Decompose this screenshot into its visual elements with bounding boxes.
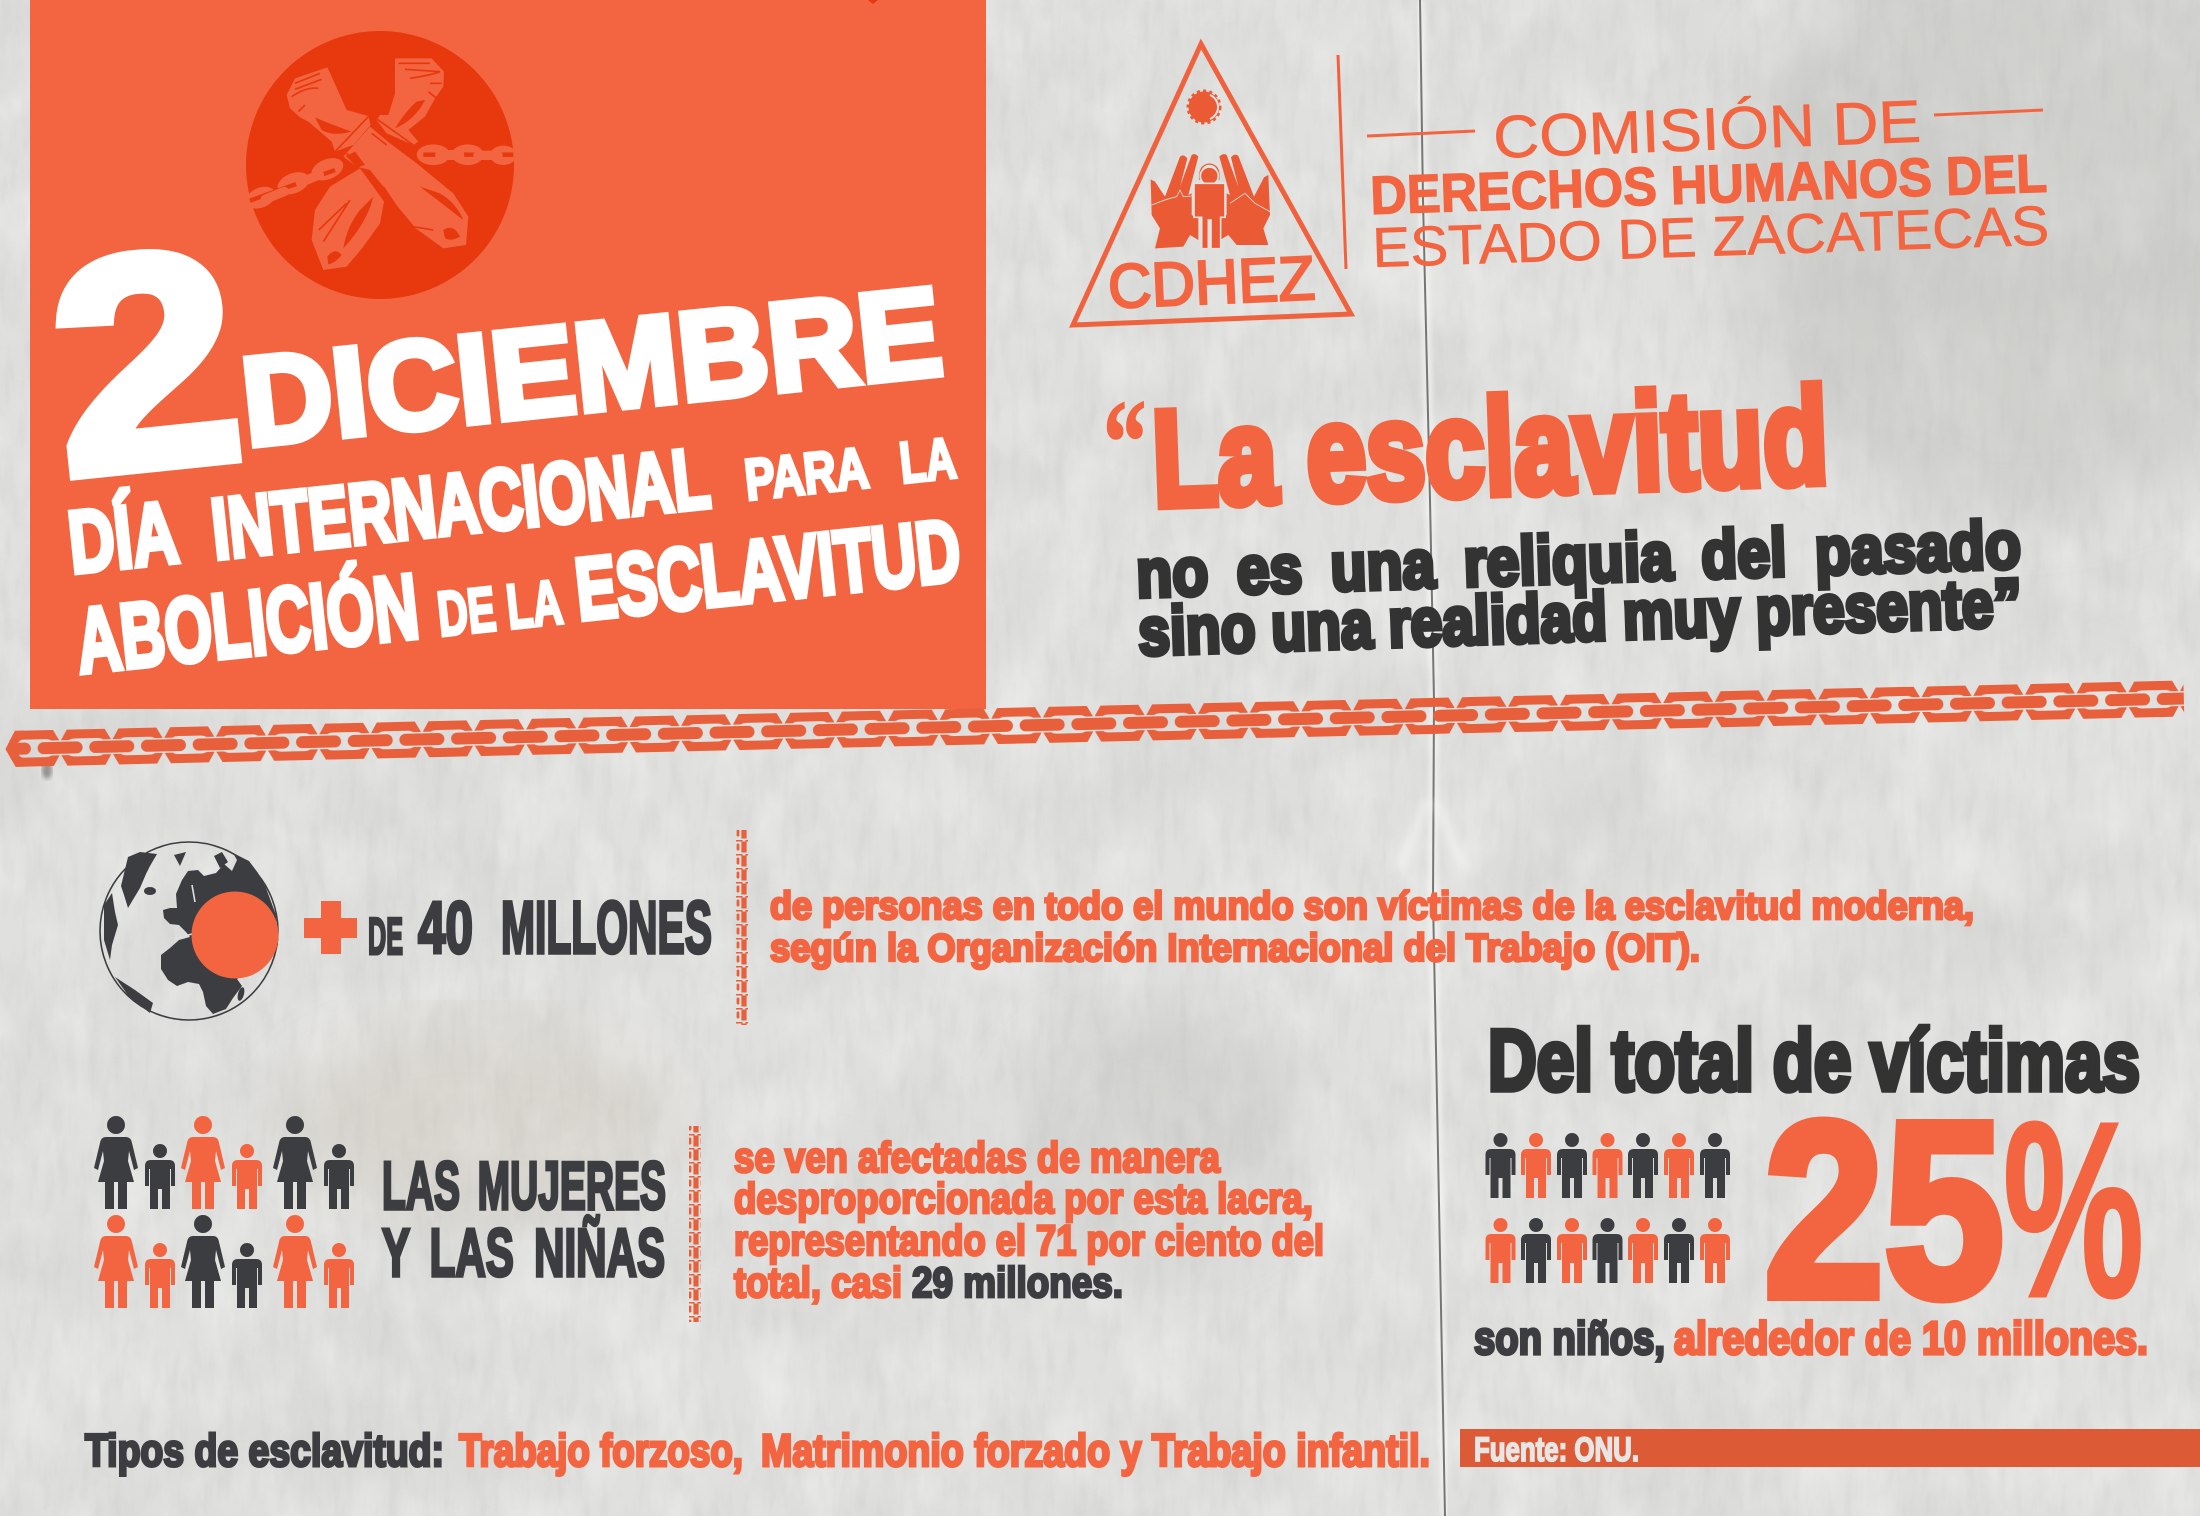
stat: more than 40 million: DE [368,908,403,966]
source bar [1460,1429,2200,1469]
day title: INTERNACIONAL [207,430,714,578]
text: children total: son niños, [1474,1312,1665,1364]
heading: institution name [1367,88,2050,279]
quote: sino una realidad muy presente” [1137,565,2023,670]
divider: logo rule [1338,55,1346,269]
quote: La esclavitud [1150,359,1831,535]
stat: 25 percent: 25 [1764,1070,2004,1349]
icon: vertical chain 2 [689,1126,701,1322]
heading: women and girls [382,1148,666,1291]
stat: more than 40 million: MILLONES [501,886,712,969]
text: types of slavery: Trabajo forzoso, [459,1425,743,1476]
pictogram: children [1486,1133,1730,1283]
heading: women and girls: Y LAS NIÑAS [382,1215,665,1291]
stat: more than 40 million [368,886,712,969]
heading: institution name: COMISIÓN DE [1492,88,1922,171]
stat: more than 40 million: 40 [418,888,473,969]
day title [64,425,965,693]
text: types of slavery: Tipos de esclavitud: [85,1425,444,1476]
day title: DÍA [64,482,182,592]
source bar: Fuente: ONU. [1474,1431,1639,1469]
icon: globe [100,842,278,1020]
mark: top edge fleck [868,0,878,4]
text: children total [1474,1312,2148,1364]
text: types of slavery: Matrimonio forzado y Trabajo infantil. [761,1425,1430,1476]
icon: plus sign [304,901,357,954]
text: women and girls description: se ven afectadas de manera [734,1134,1221,1182]
text: women and girls description: total, casi [734,1259,902,1307]
highlight: orange disc [192,892,278,978]
day title: ABOLICIÓN [71,555,423,693]
text: women and girls description [734,1134,1324,1307]
pictogram: women and girls [94,1116,354,1308]
logo acronym: CDHEZ [1107,244,1316,322]
icon: vertical chain 1 [736,830,748,1025]
icon: sun and moon [1188,92,1220,122]
month heading: DICIEMBRE [235,260,948,473]
date number: 2 [36,184,256,541]
heading: institution name: ESTADO DE ZACATECAS [1371,194,2050,279]
quote: “ [1101,375,1150,509]
quote [1101,359,2023,670]
text: 40 million description [770,885,1974,970]
quote: no es una reliquia del pasado [1135,507,2022,612]
day title: ESCLAVITUD [571,500,965,639]
text: women and girls description: desproporcionada por esta lacra, [734,1175,1313,1223]
day title: LA [897,425,959,496]
logo: CDHEZ [1073,44,1351,325]
text: women and girls description: 29 millones. [912,1259,1123,1307]
text: women and girls description: representando el 71 por ciento del [734,1217,1324,1265]
text: 40 million description: de personas en todo el mundo son víctimas de la esclavitud moderna, [770,885,1974,928]
icon: chained hands [243,31,517,299]
day title: DE LA [434,567,566,650]
day title: PARA [742,435,872,513]
heading: women and girls: LAS MUJERES [382,1148,666,1224]
heading: institution name: DERECHOS HUMANOS DEL [1369,144,2048,226]
panel: date title [30,0,986,709]
text: 40 million description: según la Organización Internacional del Trabajo (OIT). [770,927,1700,970]
icon: hands protecting a person [1151,154,1270,249]
chain divider [5,680,2184,767]
text: types of slavery [85,1425,1430,1476]
